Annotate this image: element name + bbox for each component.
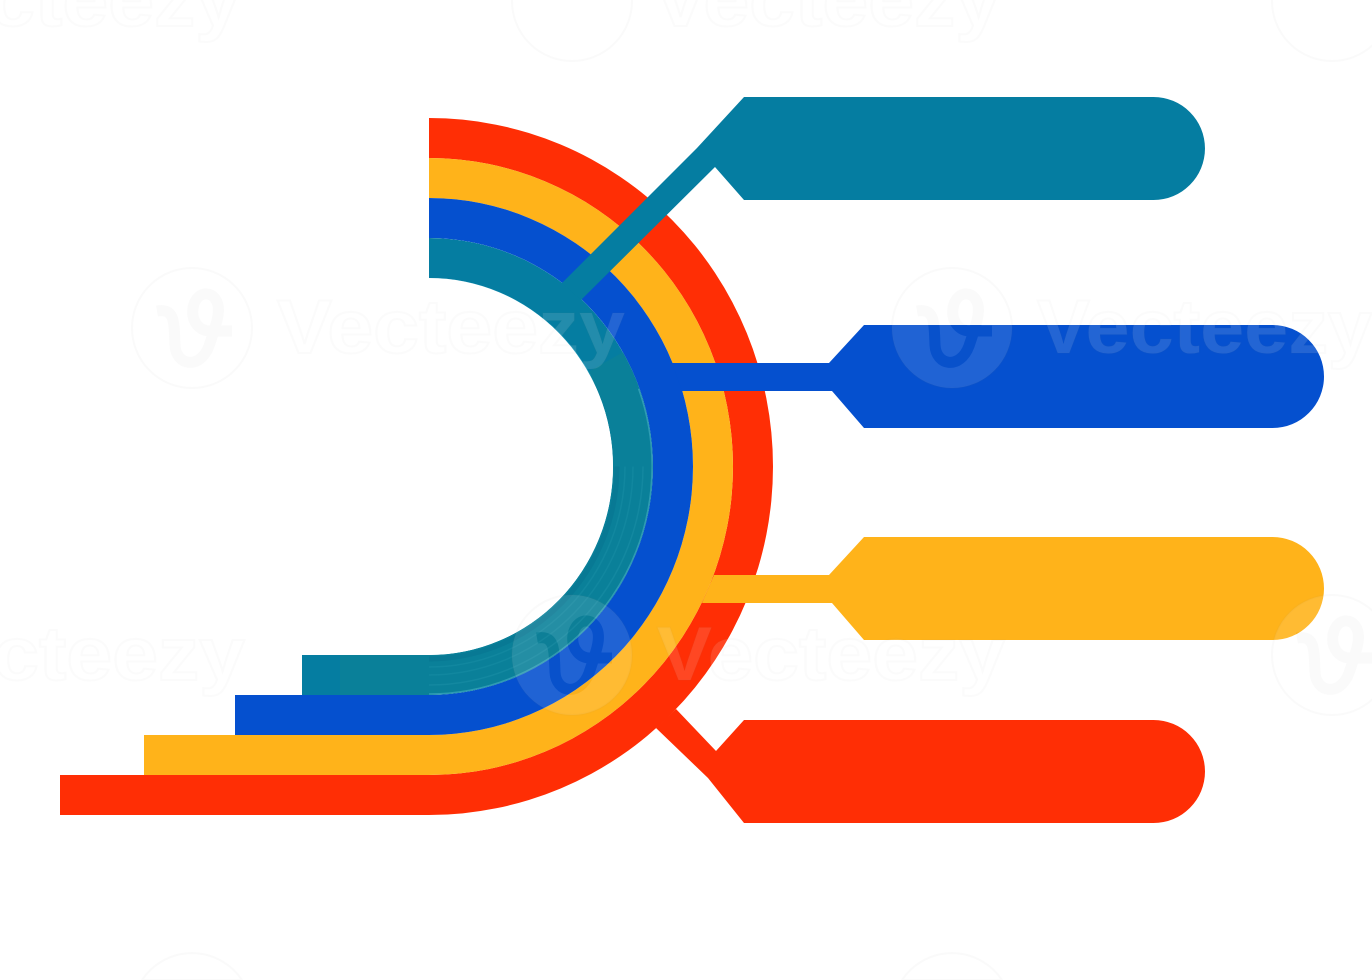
- watermark: upper row: [543, 313, 1318, 388]
- label bar: yellow with connector: [702, 537, 1324, 640]
- infographic canvas: [60, 97, 1324, 823]
- arc band: blue: [235, 198, 693, 735]
- watermark: bottom row: [142, 953, 1002, 980]
- arc band: yellow: [144, 158, 733, 775]
- label bar: red with connector: [656, 709, 1205, 823]
- watermark: upper row: Vecteezy: [1037, 285, 1372, 370]
- arc band: red: [60, 118, 773, 815]
- label bar: teal with connector: [562, 97, 1205, 300]
- label bar: blue with connector: [672, 325, 1324, 428]
- watermark: upper row: Vecteezy: [277, 285, 625, 370]
- watermark: lower row: [512, 595, 1324, 715]
- watermark: lower row: Vecteezy: [657, 612, 1005, 697]
- arc band: teal: [302, 238, 653, 695]
- watermark: top row: [0, 0, 1372, 61]
